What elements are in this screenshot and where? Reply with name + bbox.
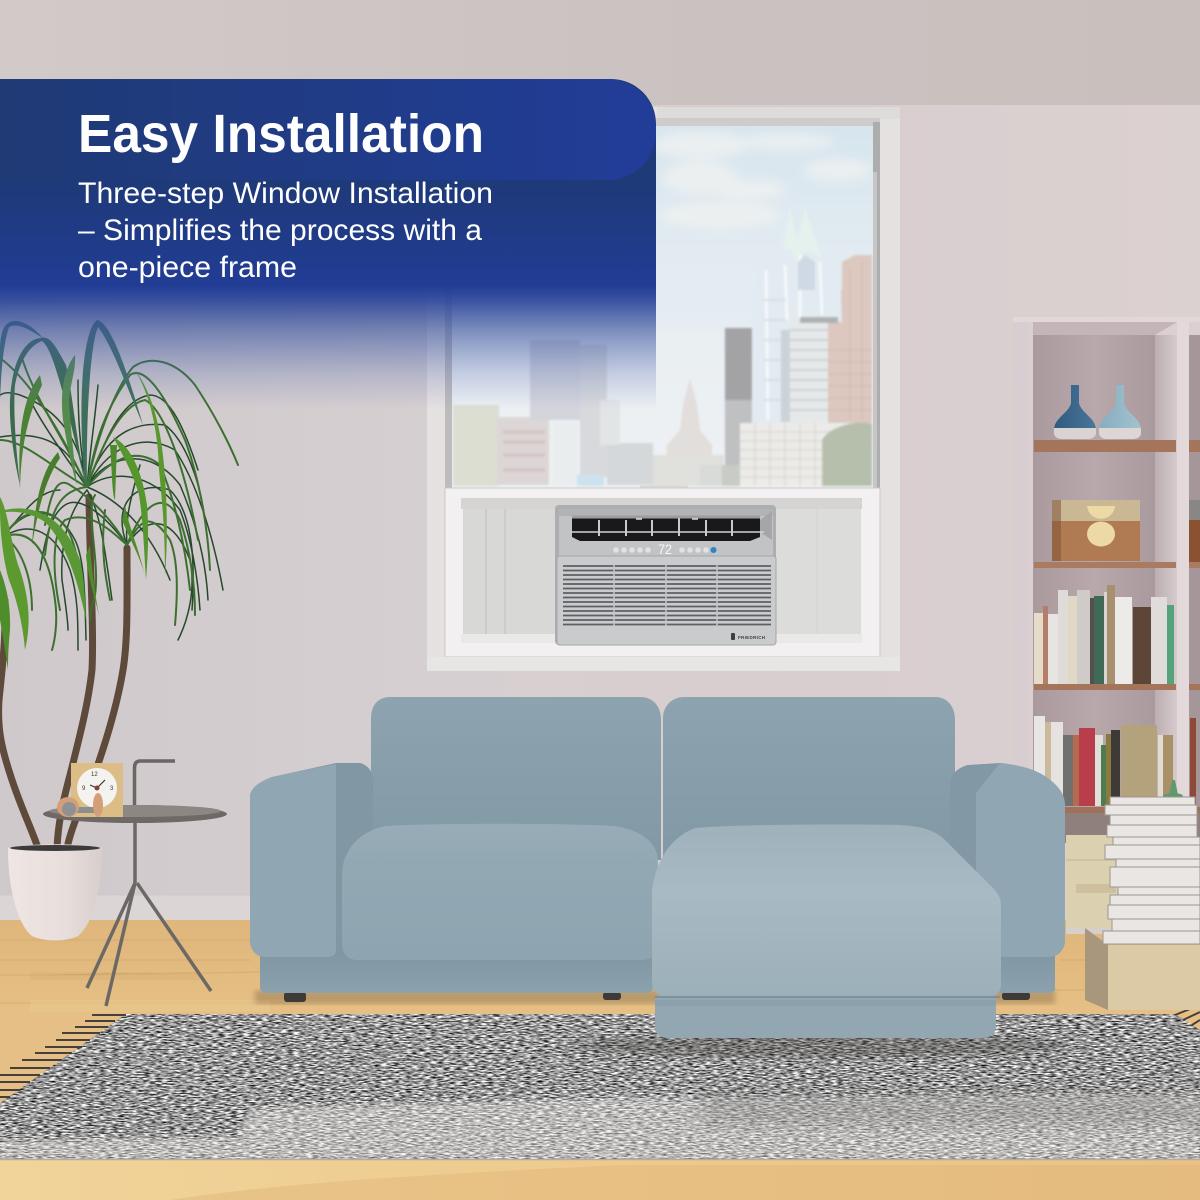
lower window sash — [445, 488, 880, 657]
description text — [78, 177, 493, 284]
clock: 3 — [110, 786, 114, 792]
bookshelf — [1013, 317, 1200, 843]
description text: one-piece frame — [78, 251, 297, 284]
headphones ornament — [57, 793, 103, 817]
dark thin leaves — [0, 380, 223, 650]
books row two — [1034, 716, 1196, 806]
rug — [0, 1005, 1200, 1162]
chaise base — [655, 997, 996, 1038]
right arm — [950, 763, 1065, 957]
rug fringe — [0, 1015, 126, 1097]
AC unit — [555, 505, 776, 645]
clock: 12 — [91, 772, 98, 778]
AC control panel — [613, 541, 716, 557]
vases — [1054, 385, 1141, 439]
decorative box — [1052, 500, 1200, 562]
AC brand logo: FRIEDRICH — [738, 635, 765, 640]
storage box — [1066, 835, 1121, 934]
city skyline — [452, 207, 872, 488]
potted plant — [0, 320, 238, 940]
plant trunks — [0, 497, 127, 848]
broad green blades — [0, 320, 167, 670]
blue gradient panel — [0, 79, 656, 430]
clouds — [652, 131, 872, 229]
clock — [71, 763, 123, 817]
left seat — [342, 824, 658, 960]
left base — [260, 950, 653, 993]
AC front grille — [557, 556, 776, 645]
AC brand logo — [731, 633, 765, 640]
stack of magazines — [1085, 797, 1200, 1010]
right base — [990, 950, 1055, 993]
heading tab — [0, 79, 656, 180]
title: Easy Installation — [78, 104, 484, 164]
AC control panel: 72 — [658, 541, 672, 557]
mid green leaves — [0, 358, 238, 650]
chaise seat — [652, 824, 1001, 997]
left arm — [250, 763, 373, 957]
AC louvre vent — [571, 516, 764, 541]
window — [427, 107, 900, 671]
description text: Three-step Window Installation — [78, 177, 493, 210]
side table with clock — [43, 761, 227, 1006]
plant pot — [8, 844, 102, 940]
sofa — [250, 697, 1065, 1038]
clock: 9 — [82, 786, 86, 792]
sofa shadow — [255, 990, 1055, 1004]
clock: 6 — [95, 801, 99, 807]
description text: – Simplifies the process with a — [78, 214, 483, 247]
back cushion right — [663, 697, 955, 860]
sofa feet — [284, 992, 1030, 1002]
back cushion left — [371, 697, 661, 860]
window frame bars — [873, 122, 880, 488]
books row one — [1034, 585, 1174, 684]
